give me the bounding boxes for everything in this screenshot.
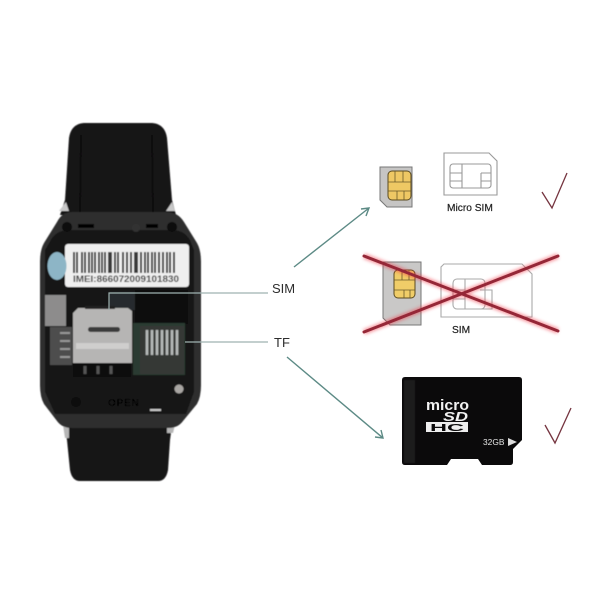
standard SIM outline: [441, 264, 532, 317]
OPEN label: OPEN: [108, 398, 140, 409]
gold chip: [388, 171, 411, 200]
capacity arrow: [508, 438, 517, 446]
SIM caption: SIM: [452, 325, 470, 336]
Micro SIM caption: Micro SIM: [447, 203, 493, 214]
arrow to TF card: [287, 357, 383, 438]
SIM label: SIM: [272, 281, 295, 296]
watch case: [40, 212, 201, 428]
check mark bottom: [545, 408, 571, 443]
microSD logo: micro: [426, 397, 469, 414]
upper strap: [59, 123, 176, 215]
TF card slot: [133, 323, 185, 375]
micro SIM outline: [444, 153, 497, 195]
red cross: [364, 256, 558, 332]
bottom screw: [174, 384, 184, 394]
microSD card: SD: [443, 409, 469, 424]
gold chip: [394, 270, 415, 298]
TF label: TF: [274, 335, 290, 350]
top screws and slots: [62, 222, 177, 232]
HC badge: HC: [430, 423, 464, 434]
TF pointer line: [185, 341, 268, 343]
TF pins: [147, 330, 177, 355]
check mark top: [542, 173, 567, 208]
bottom slot: [150, 409, 161, 411]
watch back photo: [40, 123, 201, 481]
left silver contact: [45, 295, 66, 326]
blue seal sticker: [48, 252, 66, 280]
left connector: [50, 327, 72, 365]
bottom left screws: [71, 397, 81, 407]
arrow to micro SIM: [294, 208, 369, 267]
standard SIM card: [383, 262, 421, 325]
microSD card: [402, 377, 522, 465]
IMEI sticker: [65, 244, 189, 287]
SIM slot: [73, 306, 132, 377]
barcode: [74, 252, 174, 273]
dark compartment above slots: [135, 290, 188, 324]
micro SIM card: [380, 167, 412, 207]
SIM pointer line: [109, 293, 268, 310]
IMEI number: IMEI:866072009101830: [73, 274, 179, 285]
capacity: 32GB: [483, 437, 505, 447]
lower strap: [62, 418, 175, 481]
case inner back: [45, 230, 194, 414]
